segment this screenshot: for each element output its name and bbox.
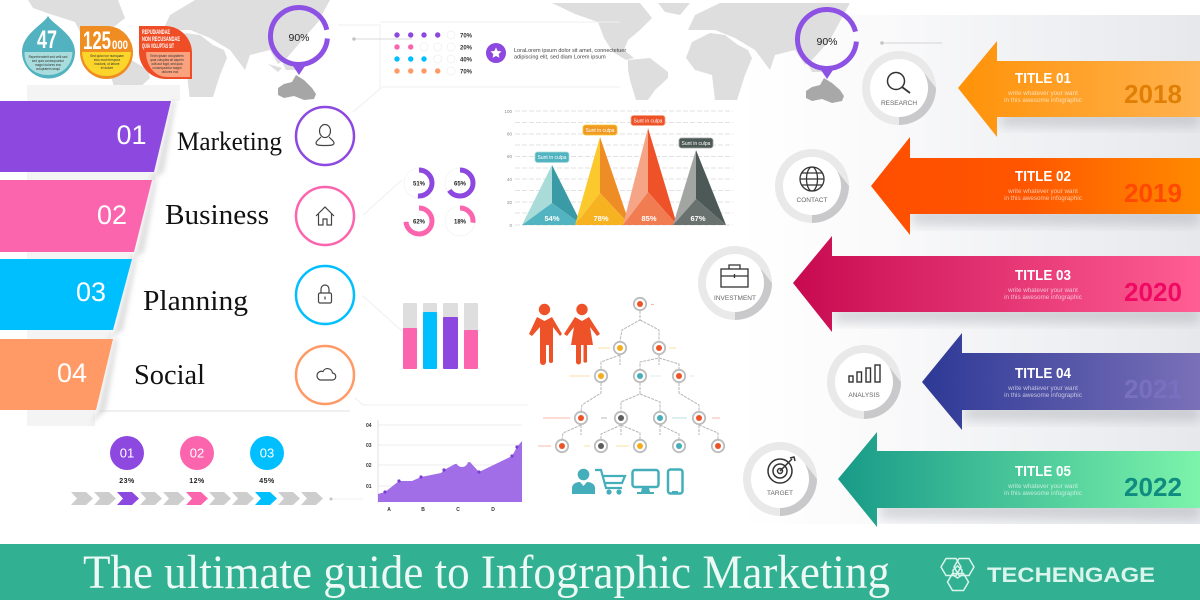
banner title: The ultimate guide to Infographic Marketing bbox=[83, 546, 890, 599]
logo: Techengage: TECHENGAGE bbox=[987, 564, 1155, 587]
pyramid chart bbox=[504, 109, 733, 228]
badge: repudiandae: dolores eos bbox=[162, 70, 179, 74]
stacked bar chart bbox=[403, 303, 478, 369]
pyramid 78%: Sunt in culpa bbox=[586, 128, 615, 134]
badge: contact: CONTACT bbox=[797, 197, 827, 204]
area chart: C bbox=[456, 507, 460, 513]
badge: repudiandae: quia voluptas sit aspern bbox=[150, 58, 184, 62]
tree connectors bbox=[562, 311, 718, 439]
arrow 02: 2019 bbox=[1124, 178, 1182, 208]
arrow 01: 2018 bbox=[1124, 79, 1182, 109]
pyramid 85%: Sunt in culpa bbox=[634, 118, 663, 124]
map pin: 90% right bbox=[795, 7, 859, 79]
chart gridlines and axis: 60 bbox=[507, 154, 512, 159]
tree diagram bbox=[538, 298, 724, 452]
badge: 47: sed quia consequuntur bbox=[32, 59, 65, 63]
badge: research: RESEARCH bbox=[881, 100, 917, 107]
arrow 04 bbox=[922, 333, 1200, 430]
icon: person bbox=[572, 469, 595, 494]
area chart: A bbox=[387, 507, 391, 513]
chart gridlines and axis: 80 bbox=[507, 132, 512, 136]
step 03 bbox=[250, 436, 284, 485]
icon circle: user bbox=[296, 107, 354, 165]
donut charts bbox=[404, 168, 475, 236]
arrow 05: TITLE 05 bbox=[1015, 464, 1071, 480]
arrow 04: write whatever your want bbox=[1007, 385, 1078, 392]
step 01: 01 bbox=[120, 446, 134, 460]
rating row 70%: 70% bbox=[460, 34, 473, 40]
badge: repudiandae: QUIA VOLUPTAS SIT bbox=[142, 44, 174, 50]
tree nodes bbox=[556, 298, 724, 452]
badge: 125 000: 000 bbox=[112, 38, 128, 52]
step 02: 12% bbox=[189, 478, 205, 485]
donut 62%: 62% bbox=[413, 220, 426, 226]
badge: 125 000: et dolore bbox=[101, 66, 113, 70]
funnel: 03 Planning bbox=[0, 259, 248, 342]
badge: investment bbox=[698, 246, 772, 320]
arrow 01: TITLE 01 bbox=[1015, 71, 1071, 87]
funnel backdrop bbox=[27, 85, 350, 426]
donut 65%: 65% bbox=[454, 182, 467, 188]
chart gridlines and axis: 20 bbox=[507, 200, 512, 205]
badge: research bbox=[862, 51, 936, 125]
badge: target bbox=[743, 442, 817, 516]
badge: 47: magni dolores eos bbox=[35, 63, 61, 67]
arrow 04: 2021 bbox=[1124, 374, 1182, 404]
chevron progress bbox=[71, 492, 323, 505]
badge: 125 000: eius modi tempora bbox=[94, 58, 120, 62]
pyramid 78%: 78% bbox=[593, 214, 609, 223]
pyramid 67%: 67% bbox=[690, 214, 706, 223]
badge: 125 000 bbox=[80, 26, 133, 79]
donut 18%: 18% bbox=[454, 220, 467, 226]
arrow 03: TITLE 03 bbox=[1015, 268, 1071, 284]
funnel: 02 Business bbox=[0, 180, 269, 264]
map pin: 90% left: 90% bbox=[288, 32, 310, 44]
pyramid 85%: 85% bbox=[641, 214, 657, 223]
arrow 05: write whatever your want bbox=[1007, 483, 1078, 490]
world map: right bbox=[552, 3, 850, 100]
badge: target: TARGET bbox=[767, 490, 793, 497]
area chart bbox=[366, 420, 522, 513]
funnel: 03 Planning: 03 bbox=[76, 277, 106, 307]
connector end dots bbox=[330, 37, 884, 500]
pyramid 78% bbox=[575, 125, 630, 225]
background panel: right side bbox=[740, 15, 1200, 524]
badge: analysis: ANALYSIS bbox=[848, 392, 880, 399]
badge: 125 000: Sed quia non numquam bbox=[90, 54, 124, 58]
arrow 04: in this awesome infographic bbox=[1004, 392, 1082, 399]
rating row 40%: 40% bbox=[460, 58, 473, 64]
tree stray marks bbox=[538, 304, 720, 446]
arrow 03 bbox=[793, 236, 1200, 332]
area chart: 04 bbox=[366, 423, 372, 429]
step circles bbox=[110, 436, 284, 485]
rating row 40% bbox=[394, 55, 473, 64]
arrow 02 bbox=[871, 137, 1200, 235]
badge: repudiandae: odit aut fugit, sed quia bbox=[151, 62, 183, 66]
world map: left bbox=[28, 0, 330, 100]
arrow 02: TITLE 02 bbox=[1015, 169, 1071, 185]
arrow 02: in this awesome infographic bbox=[1004, 195, 1082, 202]
icon circle: cloud bbox=[296, 346, 354, 404]
funnel: 02 Business: 02 bbox=[97, 200, 127, 230]
pyramid 54%: 54% bbox=[544, 214, 560, 223]
chart gridlines and axis bbox=[504, 109, 733, 228]
icon: cart bbox=[595, 470, 625, 494]
funnel: 04 Social bbox=[0, 339, 205, 425]
arrow 01: in this awesome infographic bbox=[1004, 97, 1082, 104]
arrow 03: write whatever your want bbox=[1007, 287, 1078, 294]
step 03: 45% bbox=[259, 478, 275, 485]
pyramid 67% bbox=[673, 138, 726, 225]
rating description: adipiscing elit, sed diam Lorem ipsum bbox=[514, 54, 606, 60]
pyramid 67%: Sunt in culpa bbox=[682, 141, 711, 147]
donut 51%: 51% bbox=[413, 182, 426, 188]
area chart: B bbox=[421, 507, 425, 513]
pyramid 85% bbox=[623, 116, 677, 225]
chart gridlines and axis: 40 bbox=[507, 177, 512, 182]
title banner bbox=[0, 544, 1200, 600]
rating row 70% orange: 70% bbox=[460, 70, 473, 76]
chart gridlines and axis: 0 bbox=[509, 223, 512, 228]
arrow 03: in this awesome infographic bbox=[1004, 294, 1082, 301]
funnel: 01 Marketing bbox=[0, 101, 282, 184]
step 02 bbox=[180, 436, 214, 485]
area chart: 03 bbox=[366, 443, 372, 449]
logo: Techengage bbox=[941, 558, 1155, 590]
rating row 70% orange bbox=[394, 67, 473, 76]
funnel: 01 Marketing: Marketing bbox=[177, 127, 282, 156]
badge: contact bbox=[775, 149, 849, 223]
step 01: 23% bbox=[119, 478, 135, 485]
map pin: 90% right: 90% bbox=[816, 36, 838, 48]
rating row 70% bbox=[394, 31, 473, 40]
icon: people bbox=[529, 304, 600, 365]
funnel: 04 Social: Social bbox=[134, 360, 205, 391]
arrow 02: write whatever your want bbox=[1007, 188, 1078, 195]
badge: 125 000: incidunt, ut labore bbox=[94, 62, 120, 66]
panel: dot rating bbox=[394, 31, 626, 76]
badge: repudiandae: REPUDIANDAE bbox=[142, 30, 170, 36]
arrow 01 bbox=[958, 41, 1200, 137]
map pin: 90% left bbox=[268, 5, 330, 75]
stats badges bbox=[22, 16, 192, 79]
arrow 03: 2020 bbox=[1124, 277, 1182, 307]
badge: repudiandae: NON RECUSANDAE bbox=[142, 37, 180, 43]
pyramid 54% bbox=[522, 152, 582, 225]
arrow 05 bbox=[838, 432, 1200, 527]
icon: phone bbox=[668, 470, 682, 494]
funnel: 04 Social: 04 bbox=[57, 358, 87, 388]
badge: investment: INVESTMENT bbox=[714, 295, 756, 302]
funnel: 02 Business: Business bbox=[165, 200, 269, 231]
step 01 bbox=[110, 436, 144, 485]
chart gridlines and axis: 100 bbox=[504, 109, 512, 114]
badge: repudiandae bbox=[139, 26, 192, 79]
funnel: 01 Marketing: 01 bbox=[116, 120, 147, 150]
arrow 04: TITLE 04 bbox=[1015, 366, 1071, 382]
icon circle: home bbox=[296, 187, 354, 245]
icon circle: lock bbox=[296, 266, 354, 324]
badge: 47: Reprehenderit sed velit sed bbox=[29, 55, 68, 59]
badge: repudiandae: consequuntur magni bbox=[153, 66, 182, 70]
step 02: 02 bbox=[190, 446, 204, 460]
tree node centers bbox=[559, 301, 721, 449]
rating row 20%: 20% bbox=[460, 46, 473, 52]
arrow 05: in this awesome infographic bbox=[1004, 490, 1082, 497]
badge: 47: voluptatem sequi bbox=[36, 67, 60, 71]
arrow 01: write whatever your want bbox=[1007, 90, 1078, 97]
badge: 47: 47 bbox=[37, 26, 57, 54]
step 03: 03 bbox=[260, 446, 274, 460]
icon: star bbox=[486, 43, 506, 63]
area chart: 01 bbox=[366, 484, 372, 490]
area chart: D bbox=[491, 507, 495, 513]
arrow 05: 2022 bbox=[1124, 472, 1182, 502]
area chart: 02 bbox=[366, 463, 372, 469]
funnel: 03 Planning: Planning bbox=[143, 286, 248, 317]
map: Australia left bbox=[278, 75, 316, 100]
badge: analysis bbox=[827, 345, 901, 419]
map: Australia right bbox=[806, 78, 844, 103]
badge: repudiandae: Enim ipsam voluptatem bbox=[150, 54, 184, 58]
pyramid 54%: Sunt in culpa bbox=[538, 155, 567, 161]
badge: 125 000: 125 bbox=[83, 27, 111, 55]
connector lines bbox=[331, 22, 942, 499]
icons: person, cart, monitor, phone bbox=[572, 469, 682, 494]
badge: 47 bbox=[22, 16, 75, 78]
rating row 20% bbox=[394, 43, 473, 52]
rating description: LoraLorem ipsum dolor sit amet, connectetuer bbox=[514, 48, 626, 54]
icon: monitor bbox=[632, 470, 658, 494]
